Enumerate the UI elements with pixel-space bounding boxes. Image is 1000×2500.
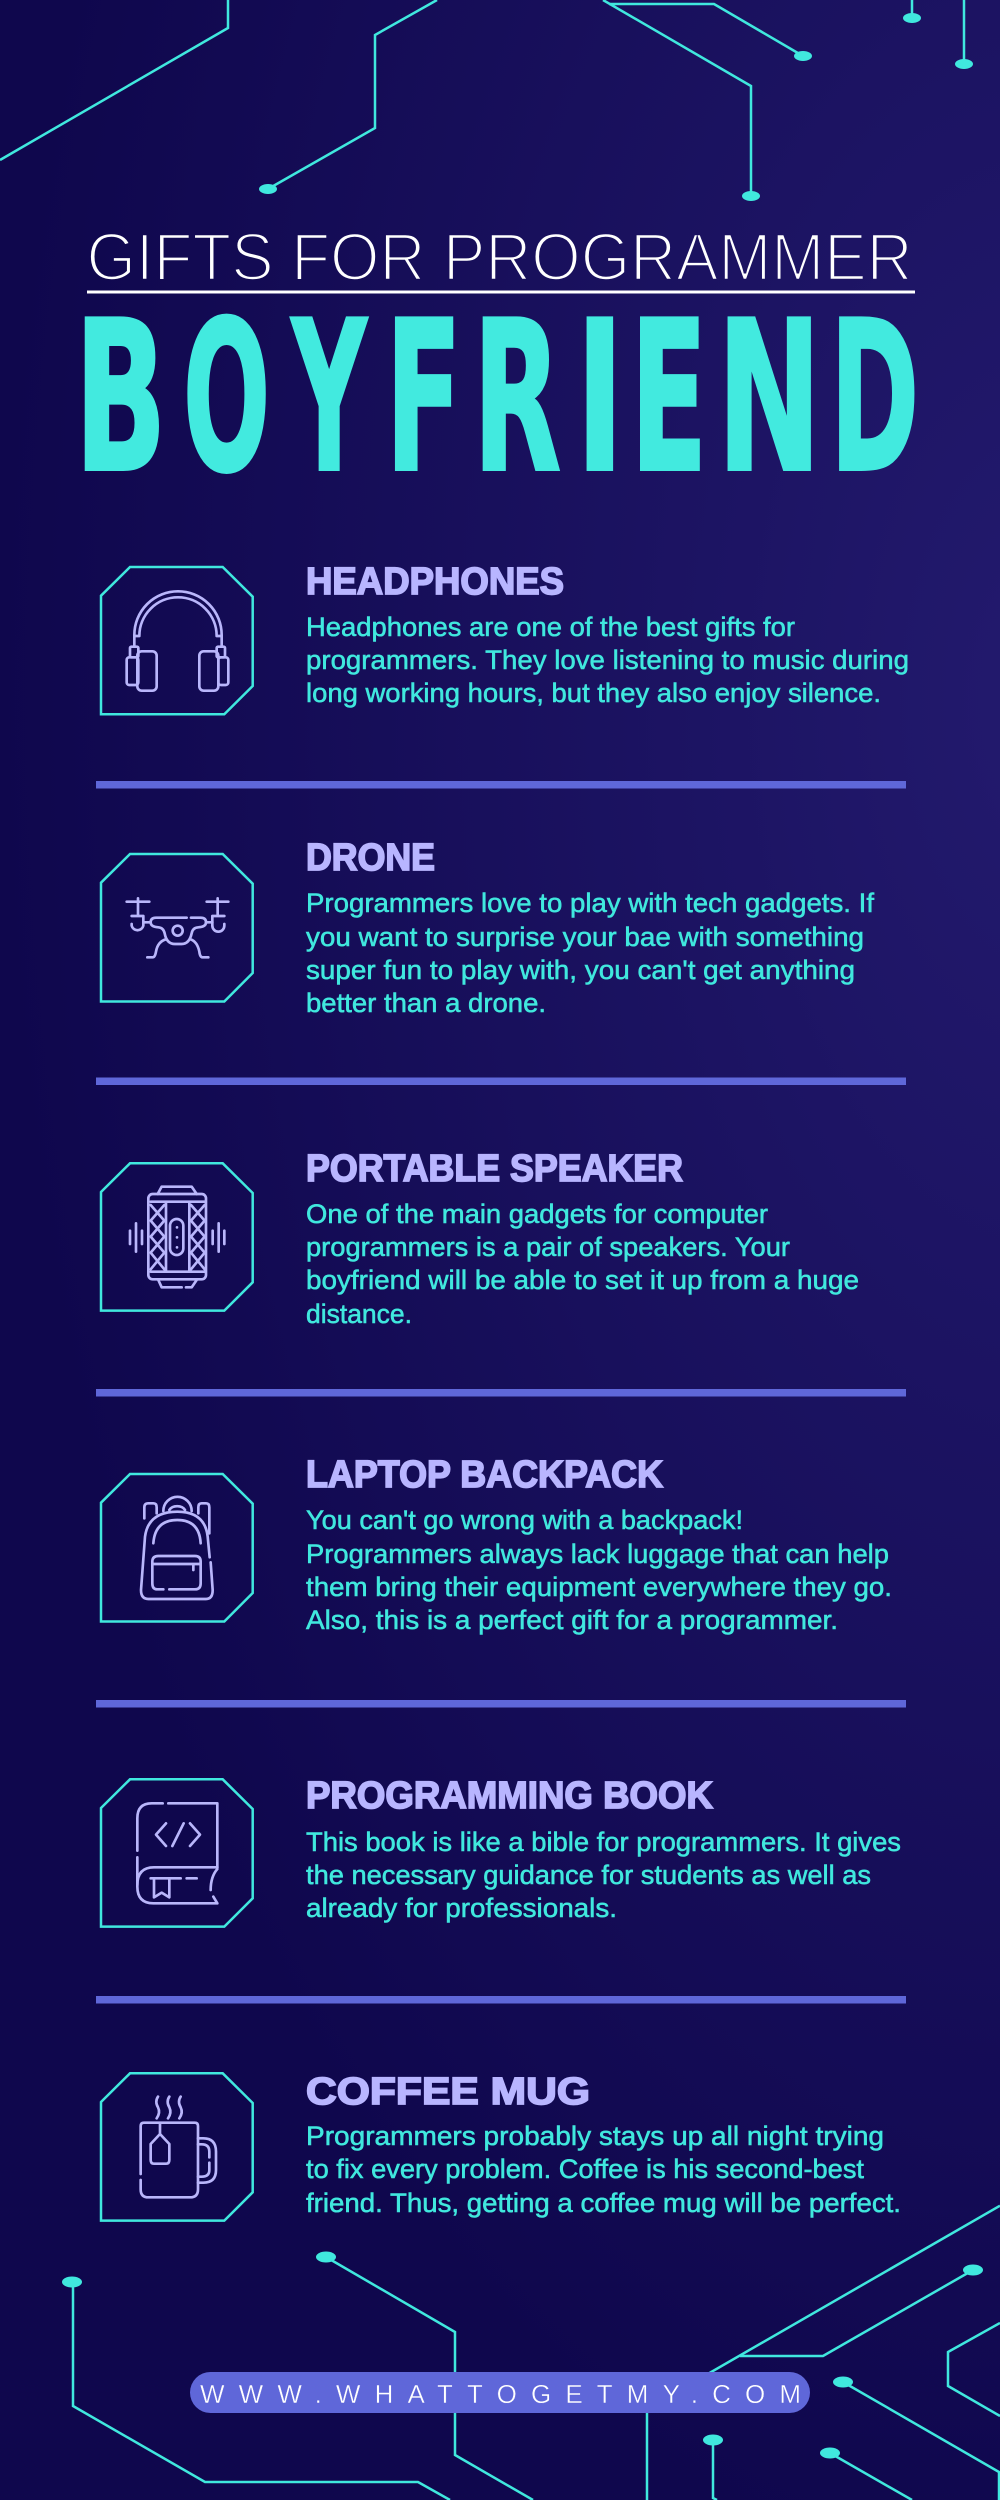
title word: boyfriend: [74, 276, 919, 520]
panel: laptop backpack: [101, 1454, 892, 1635]
description: [306, 888, 874, 1018]
title word: boyfriend: I: [576, 277, 624, 519]
icon frame: [101, 2073, 253, 2221]
circuit lines: top: [0, 0, 973, 201]
icon frame: [101, 1779, 253, 1927]
description: Programmers probably stays up all night trying: [306, 2121, 884, 2151]
website url: WWW.WHATTOGETMY.COM: [200, 2379, 801, 2409]
title underline: [87, 290, 915, 294]
description: programmers. They love listening to music during: [306, 645, 909, 675]
panel: drone: [101, 837, 874, 1018]
description: [306, 1827, 901, 1923]
description: super fun to play with, you can't get anything: [306, 955, 855, 985]
icon: book: [137, 1803, 217, 1903]
heading: PORTABLE SPEAKER: [306, 1148, 683, 1190]
icon: headphones: [127, 591, 228, 691]
panel: programming book: [101, 1775, 901, 1927]
description: [306, 612, 909, 708]
description: Headphones are one of the best gifts for: [306, 612, 795, 642]
heading: DRONE: [306, 837, 435, 879]
description: [306, 2121, 901, 2218]
website pill: [190, 2372, 810, 2413]
description: [306, 1199, 859, 1329]
title word: boyfriend: B: [74, 278, 167, 520]
title word: boyfriend: R: [473, 276, 561, 519]
title word: boyfriend: N: [717, 278, 821, 519]
description: to fix every problem. Coffee is his second-best: [306, 2154, 864, 2184]
description: One of the main gadgets for computer: [306, 1199, 768, 1229]
description: You can't go wrong with a backpack!: [306, 1505, 743, 1535]
description: programmers is a pair of speakers. Your: [306, 1232, 790, 1262]
icon: portable speaker: [130, 1187, 224, 1287]
icon: mug: [141, 2097, 216, 2197]
description: distance.: [306, 1299, 412, 1329]
description: Also, this is a perfect gift for a programmer.: [306, 1605, 838, 1635]
description: boyfriend will be able to set it up from a huge: [306, 1265, 859, 1295]
description: long working hours, but they also enjoy silence.: [306, 678, 881, 708]
panel: headphones: [101, 561, 909, 714]
icon frame: [101, 854, 253, 1002]
description: friend. Thus, getting a coffee mug will be perfect.: [306, 2188, 901, 2218]
icon frame: [101, 567, 253, 714]
description: them bring their equipment everywhere they go.: [306, 1572, 892, 1602]
title line: gifts for programmer: GIFTS FOR PROGRAMMER: [86, 220, 912, 295]
title word: boyfriend: O: [183, 277, 270, 519]
description: already for professionals.: [306, 1893, 617, 1923]
icon frame: [101, 1474, 253, 1622]
heading: LAPTOP BACKPACK: [306, 1454, 664, 1496]
description: the necessary guidance for students as well as: [306, 1860, 871, 1890]
heading: HEADPHONES: [306, 561, 564, 603]
panel: coffee mug: [101, 2071, 901, 2221]
description: Programmers love to play with tech gadgets. If: [306, 888, 874, 918]
panel: portable speaker: [101, 1148, 859, 1329]
title word: boyfriend: Y: [290, 276, 368, 519]
title: [74, 220, 919, 520]
icon: backpack: [141, 1497, 213, 1599]
heading: PROGRAMMING BOOK: [306, 1775, 714, 1817]
description: you want to surprise your bae with something: [306, 922, 864, 952]
circuit lines: bottom: [62, 2206, 1000, 2500]
icon frame: [101, 1163, 253, 1311]
description: This book is like a bible for programmers. It gives: [306, 1827, 901, 1857]
description: better than a drone.: [306, 988, 546, 1018]
description: [306, 1505, 892, 1635]
icon: drone: [127, 898, 228, 957]
title word: boyfriend: F: [386, 278, 462, 519]
description: Programmers always lack luggage that can help: [306, 1539, 889, 1569]
heading: COFFEE MUG: [306, 2071, 590, 2113]
title word: boyfriend: D: [830, 277, 919, 520]
title word: boyfriend: E: [630, 278, 707, 519]
